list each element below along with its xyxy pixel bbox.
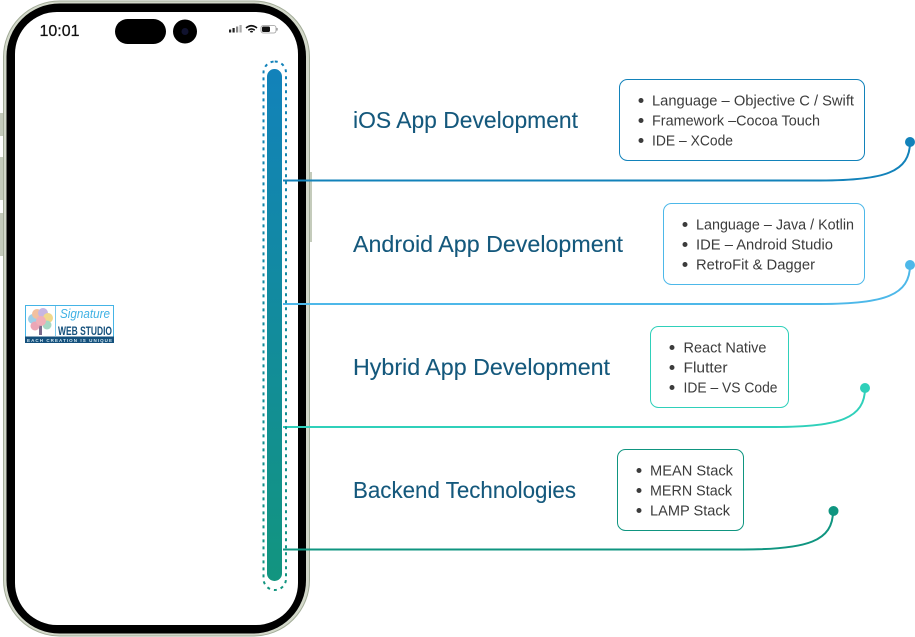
connector dots	[828, 137, 915, 516]
side buttons	[0, 113, 312, 256]
heading: Backend: Backend Technologies	[353, 477, 576, 503]
panel: iOS details	[620, 80, 864, 160]
panel: Android details	[664, 204, 864, 284]
panel: Backend details: LAMP Stack	[650, 502, 730, 520]
panel: Backend details: MEAN Stack	[650, 462, 733, 480]
logo tree	[28, 308, 53, 335]
phone	[0, 1, 312, 636]
vertical gradient bar	[267, 69, 282, 581]
panel: iOS details: Framework –Cocoa Touch	[652, 112, 820, 130]
panel: Backend details	[618, 450, 744, 530]
heading: Hybrid: Hybrid App Development	[353, 354, 611, 380]
panel: Hybrid details: React Native	[684, 340, 766, 356]
heading: iOS: iOS App Development	[353, 107, 579, 133]
logo wordmark: WEB STUDIO	[58, 324, 112, 338]
heading: Android: Android App Development	[353, 231, 624, 257]
phone screen	[15, 12, 298, 625]
panel: Hybrid details	[650, 326, 788, 408]
phone bezel	[6, 4, 306, 634]
status time: 10:01	[40, 23, 80, 40]
panel: Android details: IDE – Android Studio	[696, 236, 833, 254]
panel: Android details: Language – Java / Kotlin	[696, 216, 854, 234]
connector: iOS	[283, 142, 910, 180]
signal	[229, 25, 242, 32]
camera	[173, 20, 197, 44]
phone frame	[4, 1, 310, 636]
panel: iOS details: Language – Objective C / Swift	[652, 92, 855, 110]
connector: Android	[283, 265, 910, 304]
logo script: Signature	[60, 306, 110, 321]
logo	[25, 306, 114, 343]
connector: Hybrid	[283, 388, 865, 427]
dynamic island	[115, 19, 166, 44]
status icons	[229, 25, 278, 33]
connector: Backend	[283, 511, 833, 550]
panel: Hybrid details: IDE – VS Code	[684, 380, 778, 396]
panel: iOS details: IDE – XCode	[652, 132, 733, 150]
logo frame	[26, 306, 114, 342]
panel: Hybrid details: Flutter	[684, 360, 728, 376]
logo tagline band: EACH CREATION IS UNIQUE	[27, 338, 112, 343]
wifi	[246, 26, 257, 32]
battery	[261, 26, 278, 33]
panel: Android details: RetroFit & Dagger	[696, 256, 815, 274]
dashed outline	[264, 62, 286, 590]
panel: Backend details: MERN Stack	[650, 482, 732, 500]
